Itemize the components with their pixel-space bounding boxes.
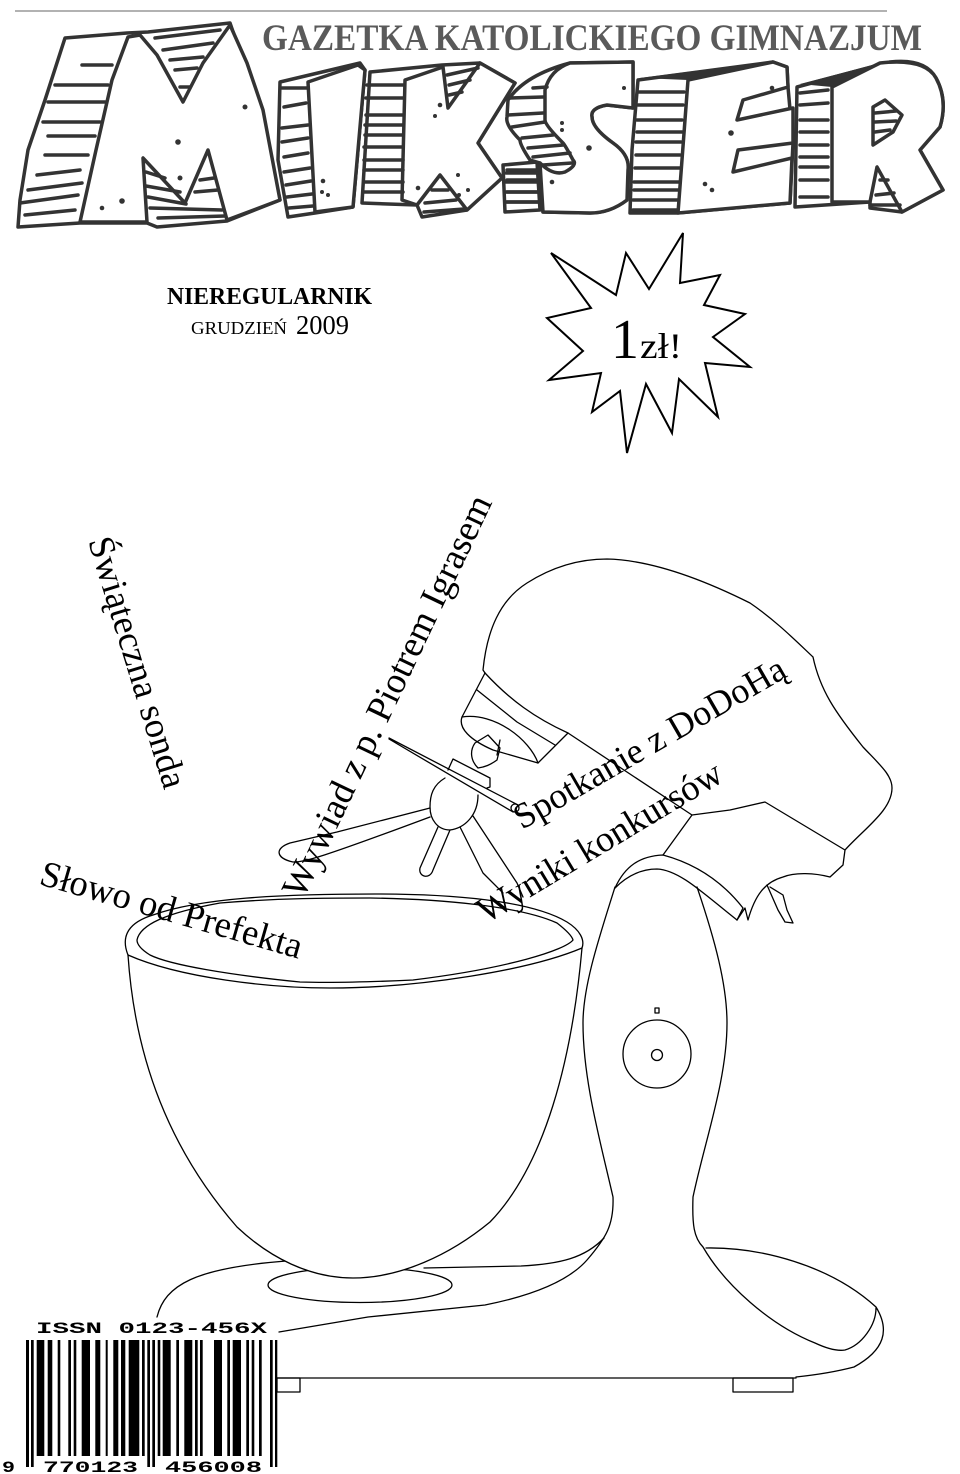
price text: zł! <box>640 326 682 366</box>
head tag <box>767 885 793 923</box>
coverline: Wyniki konkursów: Wyniki konkursów <box>469 752 730 931</box>
coverline: Słowo od Prefekta: Słowo od Prefekta <box>36 852 308 966</box>
mixer pillar <box>279 855 876 1350</box>
letter K <box>362 63 515 217</box>
letter K lower box <box>503 162 540 212</box>
coverline: Świąteczna sonda: Świąteczna sonda <box>80 531 196 793</box>
bowl seat <box>268 1268 452 1302</box>
letter M <box>18 23 280 227</box>
beater attachment <box>279 735 523 897</box>
price text: 1 <box>611 309 639 371</box>
foot left <box>277 1378 300 1392</box>
ISSN number: ISSN 0123-456X <box>36 1320 268 1338</box>
illustration: stand mixer <box>125 559 892 1392</box>
foot right <box>733 1378 793 1392</box>
decorative dots on letters <box>100 86 774 210</box>
letter I <box>278 63 365 217</box>
coverline: Spotkanie z DoDoHą: Spotkanie z DoDoHą <box>506 648 794 837</box>
mixer head <box>461 559 892 923</box>
issue info text: NIEREGULARNIK <box>167 283 372 310</box>
letter R <box>795 61 943 212</box>
speed dial <box>623 1008 691 1088</box>
letter S <box>507 62 633 213</box>
price starburst <box>547 233 750 453</box>
mixing bowl <box>125 894 583 1278</box>
issue info text: 2009 <box>296 310 349 340</box>
letter E <box>630 61 793 213</box>
barcode <box>2 1320 277 1474</box>
mixer base <box>157 1238 883 1392</box>
issue info text: GRUDZIEŃ <box>191 317 287 338</box>
masthead logo: MIKSER <box>15 11 943 227</box>
issue info text <box>167 283 372 340</box>
price text <box>611 309 682 371</box>
barcode bars <box>26 1340 277 1467</box>
coverline: Wywiad z p. Piotrem Igrasem: Wywiad z p. Piotrem Igrasem <box>274 488 501 904</box>
